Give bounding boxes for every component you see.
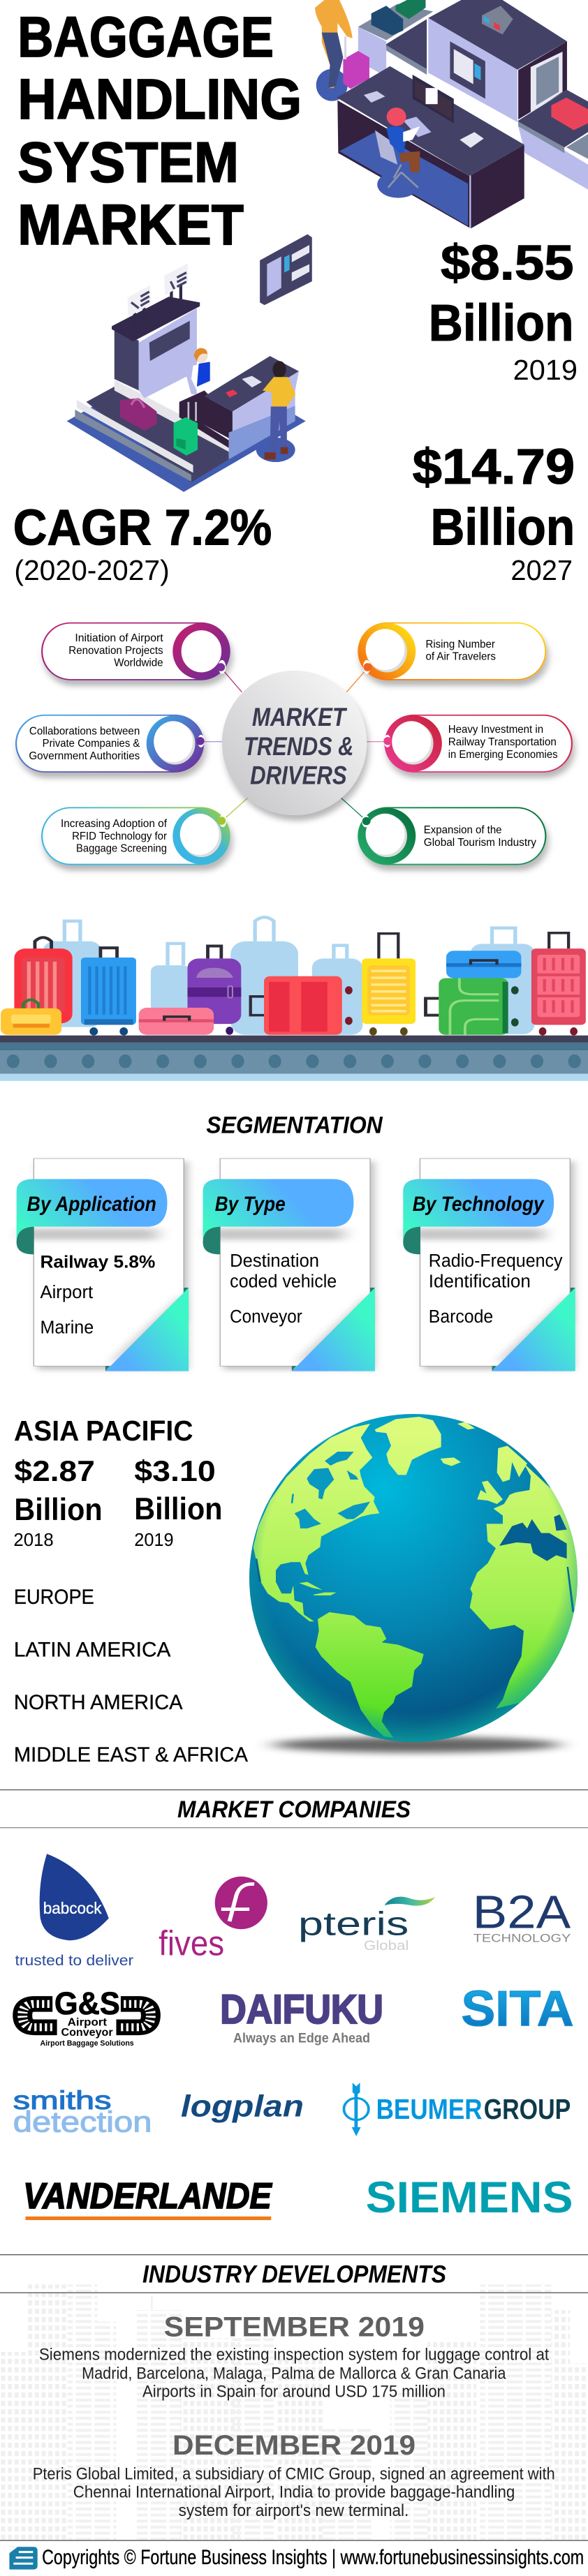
driver: airport renovation: Renovation Projects bbox=[68, 643, 163, 656]
header section bbox=[13, 0, 588, 586]
driver: railway investment bbox=[383, 715, 572, 772]
card: by technology bbox=[403, 1159, 575, 1371]
title: HANDLING bbox=[17, 68, 302, 131]
central circle bbox=[222, 671, 367, 815]
driver: RFID adoption bbox=[42, 807, 230, 865]
logo: babcock: babcock bbox=[43, 1899, 102, 1917]
central circle: DRIVERS bbox=[250, 761, 347, 790]
logo: Vanderlande bbox=[23, 2176, 272, 2220]
stat: 2027 market size: Billion bbox=[430, 498, 575, 556]
logo: Daifuku: Always an Edge Ahead bbox=[233, 2030, 370, 2046]
logo: Vanderlande: VANDERLANDE bbox=[23, 2176, 272, 2217]
heading: market companies: MARKET COMPANIES bbox=[177, 1796, 411, 1823]
driver: railway investment: Heavy Investment in bbox=[448, 723, 543, 736]
panel: regional analysis bbox=[13, 1415, 248, 1766]
logo: Daifuku bbox=[220, 1986, 383, 2046]
stat: 2019 market size bbox=[429, 235, 578, 386]
panel: market companies bbox=[0, 1789, 588, 2222]
text: Asia Pacific values: Billion bbox=[14, 1492, 103, 1527]
panel: industry developments bbox=[0, 2254, 588, 2570]
logo: G&S Airport Conveyor: Airport bbox=[68, 2016, 107, 2028]
logo: G&S Airport Conveyor: G&S bbox=[54, 1986, 120, 2021]
card: by type: Destination bbox=[230, 1251, 319, 1271]
stat: 2019 market size: 2019 bbox=[513, 354, 578, 386]
driver: rising air travelers: Rising Number bbox=[425, 637, 495, 650]
panel: segmentation bbox=[17, 1112, 575, 1371]
logo: Beumer Group bbox=[344, 2083, 571, 2136]
connector lines bbox=[205, 670, 384, 818]
driver: collaborations bbox=[16, 715, 205, 772]
background: city skyline bbox=[0, 2284, 588, 2540]
illustration: check-in counter bbox=[67, 234, 312, 492]
card: by application: By Application bbox=[27, 1193, 156, 1216]
card: by type: By Type bbox=[215, 1193, 286, 1216]
logo: G&S Airport Conveyor: Airport Baggage Solutions bbox=[40, 2039, 134, 2047]
stat: 2019 market size: $8.55 bbox=[441, 235, 574, 290]
logo: pteris bbox=[298, 1897, 435, 1953]
stat: 2019 market size: Billion bbox=[429, 293, 574, 352]
icon: Fortune Business Insights logo bbox=[9, 2547, 38, 2570]
illustration: baggage screening desk bbox=[315, 0, 588, 228]
driver: collaborations: Collaborations between bbox=[29, 724, 140, 737]
card: by type: coded vehicle bbox=[230, 1271, 337, 1291]
driver: global tourism: Expansion of the bbox=[424, 823, 502, 836]
logo: Beumer Group: BEUMER bbox=[376, 2092, 483, 2125]
logo: B2A Technology: TECHNOLOGY bbox=[473, 1931, 571, 1944]
stat: CAGR: CAGR 7.2% bbox=[13, 500, 272, 556]
logo: Smiths Detection: detection bbox=[13, 2106, 152, 2138]
logo: babcock: trusted to deliver bbox=[15, 1952, 133, 1969]
logo: Smiths Detection bbox=[13, 2085, 152, 2138]
title: BAGGAGE bbox=[17, 6, 274, 69]
title bbox=[17, 6, 302, 257]
text: Asia Pacific values: Billion bbox=[134, 1491, 222, 1526]
card: by type: Conveyor bbox=[230, 1306, 302, 1327]
text: other regions bbox=[14, 1586, 248, 1766]
driver: global tourism: Global Tourism Industry bbox=[424, 835, 536, 848]
central circle: TRENDS & bbox=[244, 731, 353, 761]
text: Asia Pacific values: 2019 bbox=[134, 1529, 174, 1549]
driver: rising air travelers bbox=[358, 623, 545, 680]
development: December 2019 bbox=[33, 2429, 555, 2519]
driver: global tourism bbox=[358, 807, 545, 865]
development: September 2019 bbox=[39, 2311, 549, 2401]
text: other regions: NORTH AMERICA bbox=[14, 1690, 183, 1713]
driver: railway investment: in Emerging Economies bbox=[448, 747, 558, 760]
card: by application: Airport bbox=[40, 1282, 93, 1302]
panel: market trends and drivers bbox=[0, 623, 588, 1081]
illustration: luggage on conveyor belt bbox=[0, 917, 588, 1081]
driver: collaborations: Private Companies & bbox=[43, 737, 140, 750]
logo: pteris: Global bbox=[364, 1938, 409, 1953]
driver: railway investment: Railway Transportation bbox=[448, 736, 557, 748]
logo: Daifuku: DAIFUKU bbox=[220, 1986, 383, 2032]
driver: RFID adoption: Baggage Screening bbox=[76, 842, 167, 854]
text: Asia Pacific values: $2.87 bbox=[14, 1454, 95, 1487]
driver: airport renovation: Worldwide bbox=[114, 656, 163, 669]
stat: 2027 market size: $14.79 bbox=[413, 438, 575, 494]
stat: 2027 market size: 2027 bbox=[510, 554, 573, 586]
development: December 2019: DECEMBER 2019 bbox=[172, 2429, 416, 2461]
logo: fives bbox=[159, 1877, 267, 1963]
card: by application: Railway 5.8% bbox=[40, 1252, 155, 1272]
driver: rising air travelers: of Air Travelers bbox=[425, 650, 496, 662]
logo: babcock bbox=[15, 1854, 133, 1969]
driver: airport renovation: Initiation of Airport bbox=[75, 631, 163, 644]
card: by application bbox=[17, 1159, 189, 1371]
stat: 2027 market size bbox=[413, 438, 575, 586]
logo: G&S Airport Conveyor bbox=[22, 1986, 151, 2047]
logo: G&S Airport Conveyor: Conveyor bbox=[61, 2026, 113, 2038]
text: Asia Pacific values: 2018 bbox=[13, 1529, 54, 1549]
logo: pteris: pteris bbox=[298, 1905, 409, 1942]
driver: RFID adoption: RFID Technology for bbox=[72, 829, 167, 842]
driver: collaborations: Government Authorities bbox=[29, 750, 140, 762]
driver: RFID adoption: Increasing Adoption of bbox=[61, 817, 167, 830]
card: by technology: Identification bbox=[429, 1271, 531, 1291]
central circle: MARKET bbox=[252, 702, 348, 731]
logo: Smiths Detection: smiths bbox=[13, 2085, 111, 2115]
driver: airport renovation bbox=[42, 623, 230, 680]
stat: CAGR: (2020-2027) bbox=[14, 554, 170, 586]
text: other regions: EUROPE bbox=[14, 1586, 94, 1608]
card: by application: Marine bbox=[40, 1318, 94, 1338]
text: other regions: LATIN AMERICA bbox=[14, 1638, 170, 1661]
development: December 2019: system for airport's new terminal. bbox=[179, 2501, 409, 2519]
card: by type bbox=[203, 1159, 375, 1371]
text: Asia Pacific values bbox=[13, 1415, 222, 1549]
title: SYSTEM bbox=[17, 131, 239, 195]
logo: fives: fives bbox=[159, 1923, 224, 1963]
logo: B2A Technology: B2A bbox=[473, 1886, 571, 1939]
text: Asia Pacific values: $3.10 bbox=[134, 1454, 216, 1487]
globe bbox=[249, 1414, 582, 1752]
logo: Logplan: logplan bbox=[181, 2090, 304, 2124]
title: MARKET bbox=[17, 193, 244, 257]
development: September 2019: SEPTEMBER 2019 bbox=[164, 2311, 425, 2342]
stat: CAGR bbox=[13, 500, 272, 586]
text: other regions: MIDDLE EAST & AFRICA bbox=[14, 1743, 248, 1766]
heading: segmentation: SEGMENTATION bbox=[206, 1112, 383, 1138]
card: by technology: Barcode bbox=[429, 1306, 493, 1327]
text: Asia Pacific values: ASIA PACIFIC bbox=[14, 1415, 193, 1447]
